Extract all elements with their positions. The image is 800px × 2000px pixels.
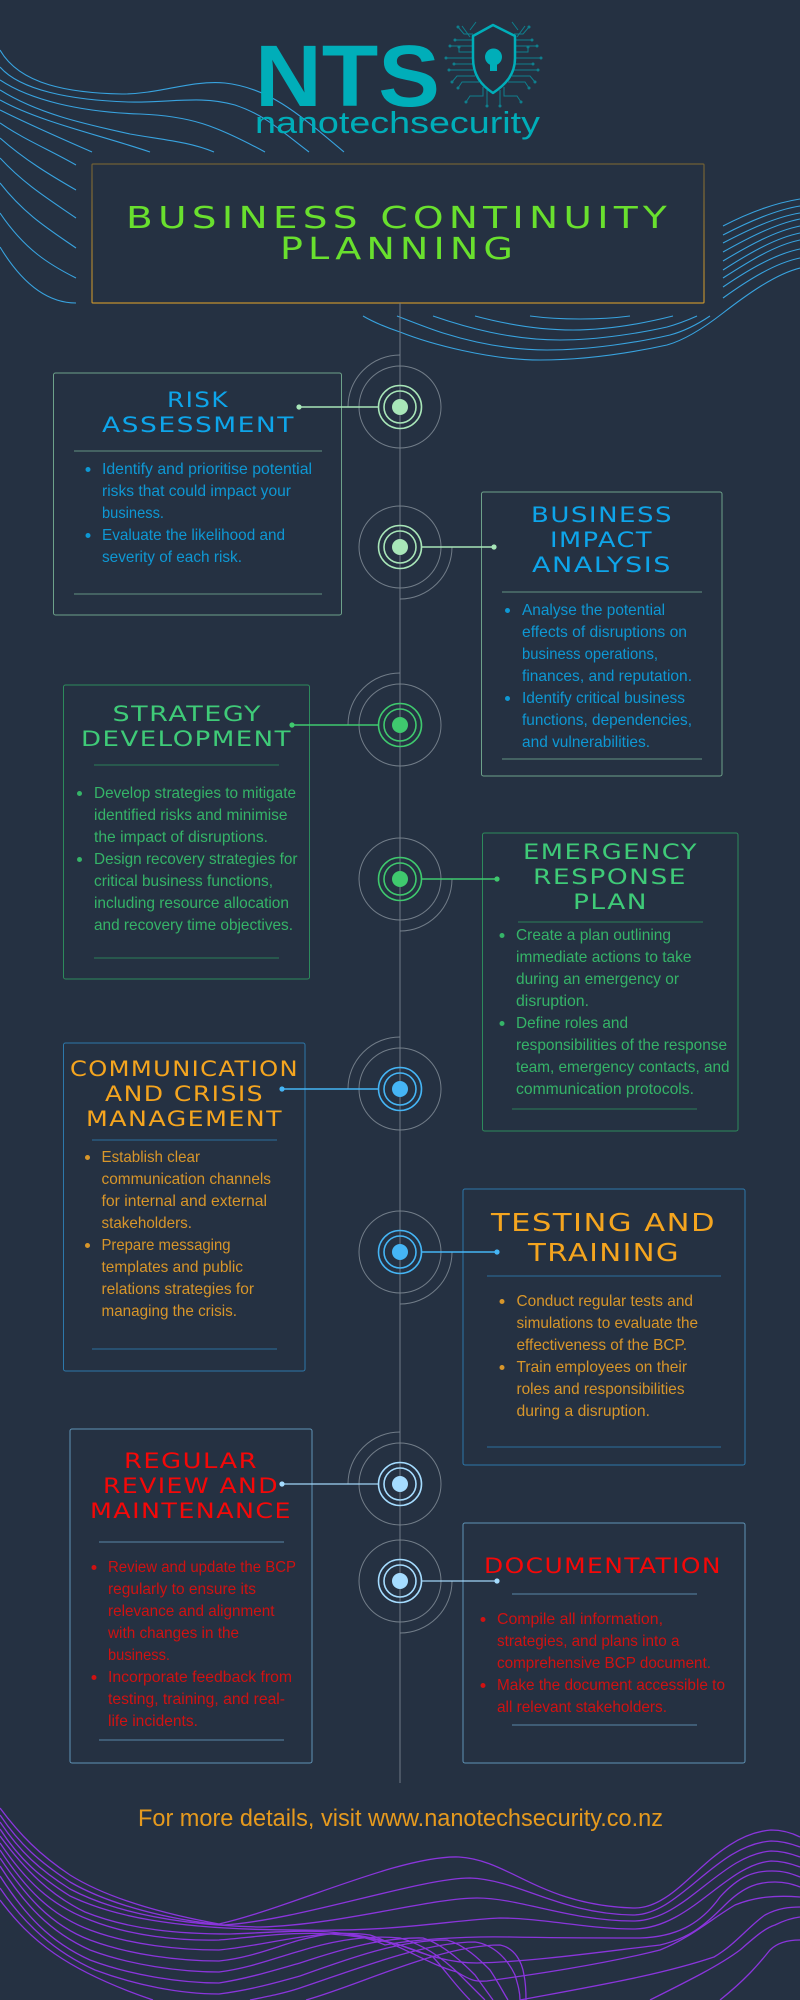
bullets: testing and training: Train employees on their xyxy=(516,1359,688,1376)
bullets: emergency response plan: immediate actions to take xyxy=(516,949,692,966)
bullets: strategy development: identified risks and minimise xyxy=(94,807,288,824)
bullets: documentation xyxy=(480,1611,725,1716)
node 3 xyxy=(289,673,441,766)
title text: PLANNING xyxy=(280,232,518,267)
bullets: emergency response plan: responsibilities of the response xyxy=(516,1037,727,1054)
heading: regular review and maintenance: MAINTENANCE xyxy=(90,1499,292,1523)
bullets: regular review and maintenance: regularly to ensure its xyxy=(108,1581,256,1598)
heading: communication and crisis management: COMMUNICATION xyxy=(70,1057,299,1081)
bullets: emergency response plan: Define roles and xyxy=(516,1015,628,1032)
bullets: regular review and maintenance xyxy=(92,1559,296,1730)
bullets: regular review and maintenance: business. xyxy=(108,1647,170,1664)
title text: BUSINESS CONTINUITY xyxy=(126,201,672,236)
bullets: strategy development: including resource allocation xyxy=(94,895,289,912)
bullets: communication and crisis management: templates and public xyxy=(102,1259,243,1276)
heading: documentation: DOCUMENTATION xyxy=(484,1554,722,1578)
bullets: strategy development: the impact of disruptions. xyxy=(94,829,268,846)
heading: regular review and maintenance: REVIEW AND xyxy=(103,1474,279,1498)
heading: risk assessment: RISK xyxy=(167,388,229,412)
heading: strategy development: STRATEGY xyxy=(112,702,262,726)
bullets: testing and training xyxy=(500,1293,698,1420)
bullets: regular review and maintenance: Review and update the BCP xyxy=(108,1559,296,1576)
bullets: testing and training: during a disruption. xyxy=(516,1403,650,1420)
heading: business impact analysis: BUSINESS xyxy=(531,503,673,527)
footer link text: For more details, visit www.nanotechsecurity.co.nz xyxy=(138,1805,663,1832)
node 2 xyxy=(359,506,497,599)
bullets: regular review and maintenance: Incorporate feedback from xyxy=(108,1669,292,1686)
icon: circuit shield with keyhole xyxy=(444,22,542,108)
bullets: risk assessment: Evaluate the likelihood and xyxy=(102,527,285,544)
bullets: communication and crisis management: Establish clear xyxy=(102,1149,201,1166)
heading: testing and training xyxy=(490,1208,716,1267)
heading: strategy development: DEVELOPMENT xyxy=(81,727,292,751)
bullets: business impact analysis: and vulnerabilities. xyxy=(522,734,650,751)
heading: emergency response plan: RESPONSE xyxy=(533,865,687,889)
bullets: communication and crisis management xyxy=(85,1149,271,1320)
bullets: communication and crisis management: stakeholders. xyxy=(102,1215,192,1232)
bullets: risk assessment: severity of each risk. xyxy=(102,549,242,566)
bullets: business impact analysis xyxy=(505,602,692,751)
bullets: emergency response plan: communication protocols. xyxy=(516,1081,694,1098)
bullets: emergency response plan: Create a plan outlining xyxy=(516,927,671,944)
heading: emergency response plan: PLAN xyxy=(573,890,648,914)
bullets: communication and crisis management: communication channels xyxy=(102,1171,271,1188)
logo wordmark NTS: NTS xyxy=(255,28,440,125)
panel: testing and training xyxy=(463,1189,745,1465)
bullets: emergency response plan: disruption. xyxy=(516,993,589,1010)
bullets: communication and crisis management: Prepare messaging xyxy=(102,1237,230,1254)
panel: emergency response plan xyxy=(482,833,738,1131)
panel: communication and crisis management xyxy=(64,1043,305,1371)
title text xyxy=(126,201,672,267)
heading: communication and crisis management: AND CRISIS xyxy=(105,1082,264,1106)
bullets: strategy development xyxy=(77,785,298,934)
bullets: regular review and maintenance: with changes in the xyxy=(107,1625,239,1642)
top-left blue wave lines xyxy=(0,50,344,303)
heading: testing and training: TESTING AND xyxy=(490,1208,716,1237)
bullets: business impact analysis: business operations, xyxy=(522,646,658,663)
node 1 xyxy=(296,355,441,448)
bullets: business impact analysis: effects of disruptions on xyxy=(522,624,687,641)
bullets: testing and training: effectiveness of the BCP. xyxy=(516,1337,687,1354)
panel: business impact analysis xyxy=(482,492,722,776)
bullets: documentation: strategies, and plans into a xyxy=(497,1633,680,1650)
logo xyxy=(255,22,542,140)
bullets: testing and training: Conduct regular tests and xyxy=(516,1293,693,1310)
top-right blue wave lines xyxy=(363,199,800,360)
heading: emergency response plan: EMERGENCY xyxy=(523,840,698,864)
heading: business impact analysis: ANALYSIS xyxy=(532,553,672,577)
node 7 xyxy=(279,1432,441,1525)
bullets: business impact analysis: Identify critical business xyxy=(522,690,685,707)
bullets: regular review and maintenance: testing, training, and real- xyxy=(108,1691,285,1708)
heading: business impact analysis xyxy=(531,503,673,577)
heading: business impact analysis: IMPACT xyxy=(550,528,653,552)
bullets: testing and training: simulations to evaluate the xyxy=(516,1315,698,1332)
bullets: communication and crisis management: for internal and external xyxy=(102,1193,267,1210)
bullets: strategy development: and recovery time objectives. xyxy=(94,917,293,934)
heading: risk assessment: ASSESSMENT xyxy=(102,413,295,437)
node 6 xyxy=(359,1211,500,1304)
heading: emergency response plan xyxy=(523,840,698,914)
bullets: testing and training: roles and responsibilities xyxy=(516,1381,684,1398)
bullets: documentation: comprehensive BCP document. xyxy=(497,1655,711,1672)
bullets: documentation: Make the document accessible to xyxy=(497,1677,725,1694)
bullets: risk assessment: business. xyxy=(102,505,164,522)
bullets: communication and crisis management: managing the crisis. xyxy=(102,1303,237,1320)
bullets: business impact analysis: Analyse the potential xyxy=(522,602,665,619)
bullets: risk assessment xyxy=(86,461,312,566)
bullets: communication and crisis management: relations strategies for xyxy=(102,1281,255,1298)
bullets: business impact analysis: finances, and reputation. xyxy=(522,668,692,685)
heading: regular review and maintenance: REGULAR xyxy=(124,1449,258,1473)
heading: communication and crisis management xyxy=(70,1057,299,1131)
bullets: emergency response plan: team, emergency contacts, and xyxy=(516,1059,730,1076)
bullets: risk assessment: Identify and prioritise potential xyxy=(102,461,312,478)
node 5 xyxy=(279,1037,441,1130)
bullets: risk assessment: risks that could impact your xyxy=(102,483,292,500)
bullets: strategy development: Design recovery strategies for xyxy=(94,851,298,868)
bullets: emergency response plan xyxy=(500,927,730,1098)
logo wordmark nanotechsecurity: nanotechsecurity xyxy=(255,105,541,140)
panel: documentation xyxy=(463,1523,745,1763)
bullets: regular review and maintenance: relevance and alignment xyxy=(108,1603,275,1620)
bullets: emergency response plan: during an emergency or xyxy=(516,971,680,988)
panel: strategy development xyxy=(64,685,310,979)
bullets: documentation: all relevant stakeholders. xyxy=(497,1699,667,1716)
heading: communication and crisis management: MANAGEMENT xyxy=(86,1107,283,1131)
bullets: strategy development: Develop strategies to mitigate xyxy=(94,785,296,802)
node 8 xyxy=(359,1540,500,1633)
bullets: business impact analysis: functions, dependencies, xyxy=(522,712,692,729)
timeline spine xyxy=(399,303,401,1783)
bottom purple wave lines xyxy=(0,1808,800,2000)
panel: risk assessment xyxy=(54,373,342,615)
title panel xyxy=(92,164,704,303)
node 4 xyxy=(359,838,500,931)
heading: regular review and maintenance xyxy=(90,1449,292,1523)
heading: risk assessment xyxy=(102,388,295,437)
heading: strategy development xyxy=(81,702,292,751)
bullets: documentation: Compile all information, xyxy=(497,1611,663,1628)
bullets: strategy development: critical business functions, xyxy=(94,873,273,890)
panel: regular review and maintenance xyxy=(70,1429,312,1763)
heading: testing and training: TRAINING xyxy=(527,1238,680,1267)
bullets: regular review and maintenance: life incidents. xyxy=(108,1713,198,1730)
